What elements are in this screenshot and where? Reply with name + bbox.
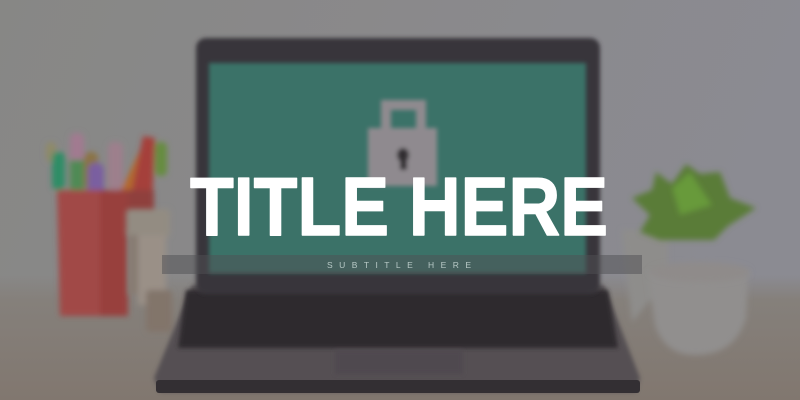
plant in white pot — [622, 164, 756, 355]
subtitle band — [162, 255, 642, 274]
glass behind plant — [622, 230, 668, 322]
icon: padlock — [368, 100, 437, 186]
laptop — [154, 38, 640, 393]
subtitle: SUBTITLE HERE — [327, 260, 471, 270]
title: TITLE HERE — [190, 160, 608, 253]
pencil cup with pens — [46, 133, 167, 316]
wooden figure — [126, 209, 172, 332]
laptop screen — [209, 63, 586, 273]
laptop lid — [196, 38, 600, 294]
laptop base — [154, 285, 640, 393]
white pot — [648, 272, 748, 355]
succulent leaves — [632, 164, 756, 240]
